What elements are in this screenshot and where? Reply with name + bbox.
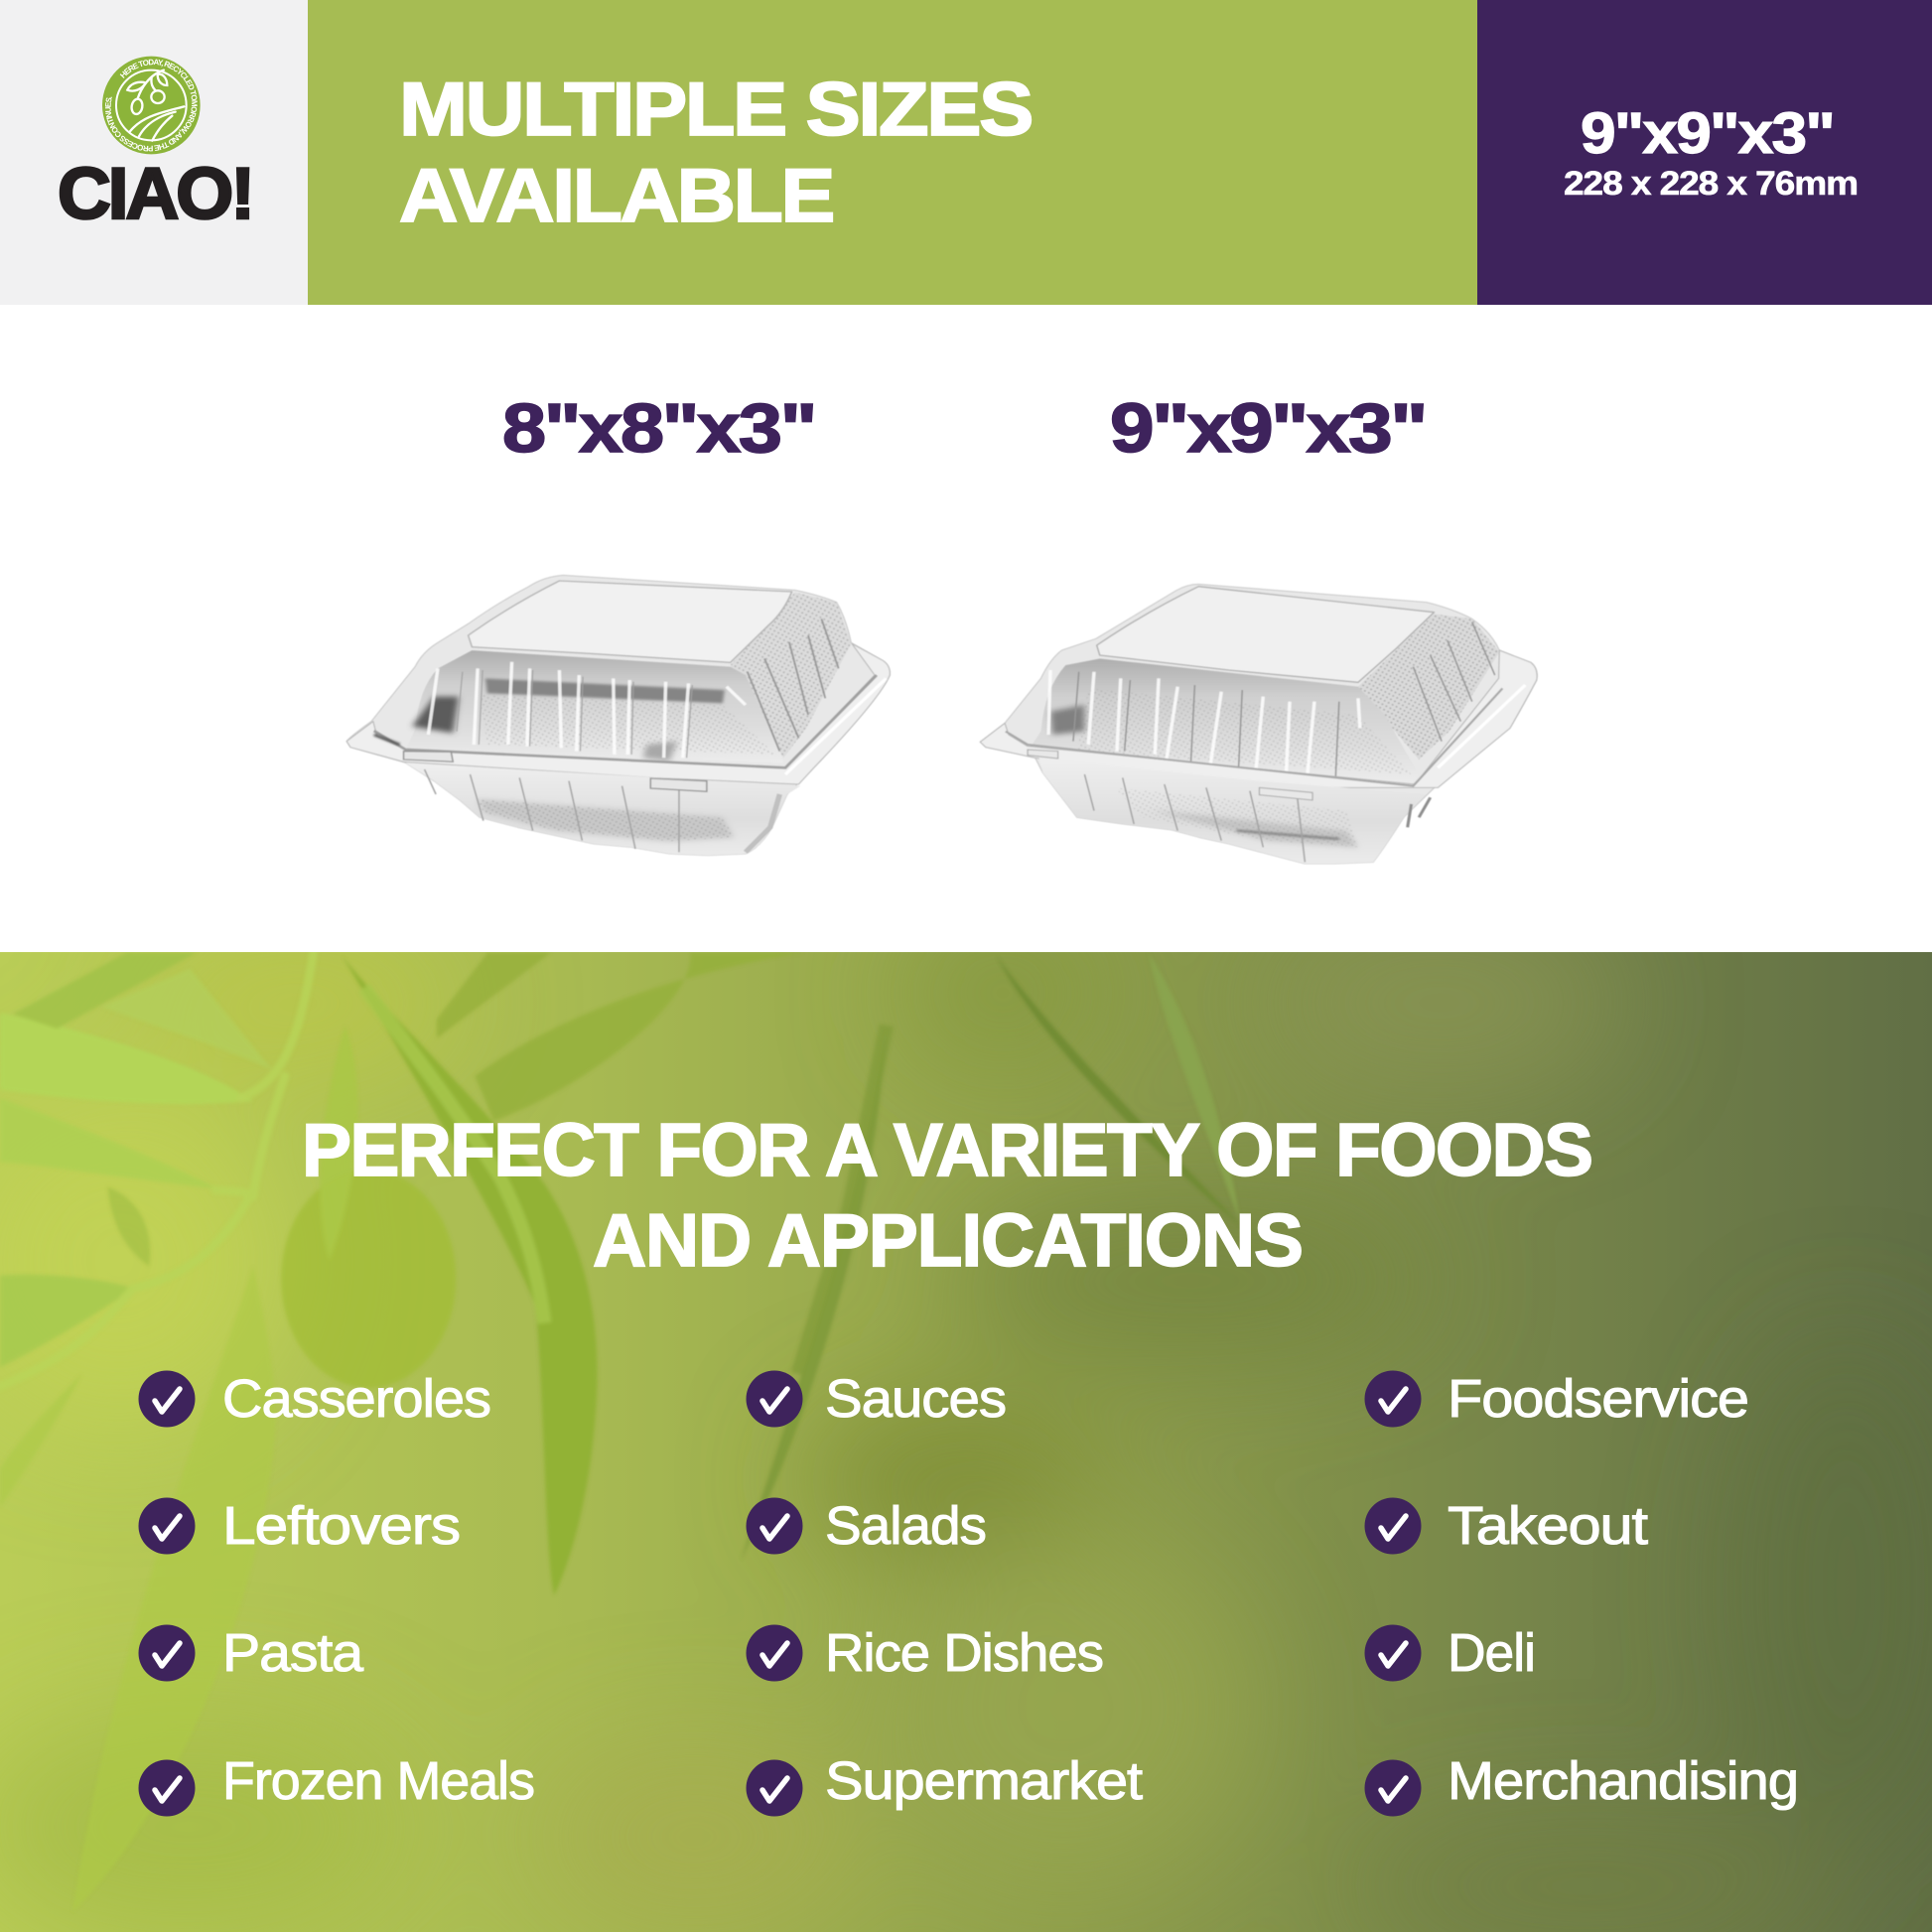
- size label: 9"x9"x3": [1581, 101, 1834, 166]
- checklist column 1: Casseroles: [222, 1369, 490, 1429]
- checklist column 3: Takeout: [1448, 1496, 1648, 1556]
- checklist column 1: Leftovers: [222, 1496, 460, 1556]
- size heading 9x9x3: 9"x9"x3": [1110, 389, 1426, 467]
- blurred foliage background: [0, 913, 1932, 1932]
- purple size panel: [1477, 0, 1932, 305]
- checklist column 3: Deli: [1448, 1623, 1535, 1683]
- green title panel: [308, 0, 1477, 305]
- checklist column 1: Pasta: [222, 1623, 364, 1683]
- checklist column 2: Supermarket: [825, 1751, 1143, 1811]
- check icons: [1364, 1370, 1422, 1817]
- thin distant leaves: [1003, 965, 1238, 1216]
- checklist column 1: Frozen Meals: [222, 1751, 534, 1811]
- checklist column 3: Foodservice: [1448, 1369, 1748, 1429]
- check icons: [747, 1370, 802, 1817]
- title: AVAILABLE: [399, 154, 833, 238]
- applications panel: [0, 913, 1932, 1932]
- product panel: [346, 389, 1537, 864]
- logo badge: HERE TODAY, RECYCLED TOMORROW, AND THE PROCESS CONTINUES.: [105, 60, 198, 151]
- product photo: 9 inch clamshell: [980, 584, 1537, 864]
- checklist column 2: [747, 1369, 1143, 1817]
- checklist column 3: Merchandising: [1448, 1751, 1798, 1811]
- olive leaves and stems: [0, 952, 893, 1712]
- checklist column 2: Sauces: [825, 1369, 1006, 1429]
- section heading: PERFECT FOR A VARIETY OF FOODS: [302, 1108, 1593, 1191]
- product photo: 8 inch clamshell: [346, 575, 890, 856]
- metric size label: 228 x 228 x 76mm: [1564, 165, 1858, 203]
- title: [399, 68, 1032, 238]
- logo wordmark: CIAO!: [58, 154, 252, 234]
- size heading 8x8x3: 8"x8"x3": [502, 389, 815, 467]
- check icons: [139, 1370, 195, 1817]
- title: MULTIPLE SIZES: [399, 68, 1032, 152]
- checklist column 2: Rice Dishes: [825, 1623, 1103, 1683]
- section heading: AND APPLICATIONS: [593, 1198, 1304, 1282]
- checklist column 1: [139, 1369, 534, 1817]
- checklist column 2: Salads: [825, 1496, 986, 1556]
- checklist column 3: [1364, 1369, 1798, 1817]
- section heading: [306, 1122, 1591, 1267]
- header band: [0, 0, 1932, 305]
- logo panel: [0, 0, 308, 305]
